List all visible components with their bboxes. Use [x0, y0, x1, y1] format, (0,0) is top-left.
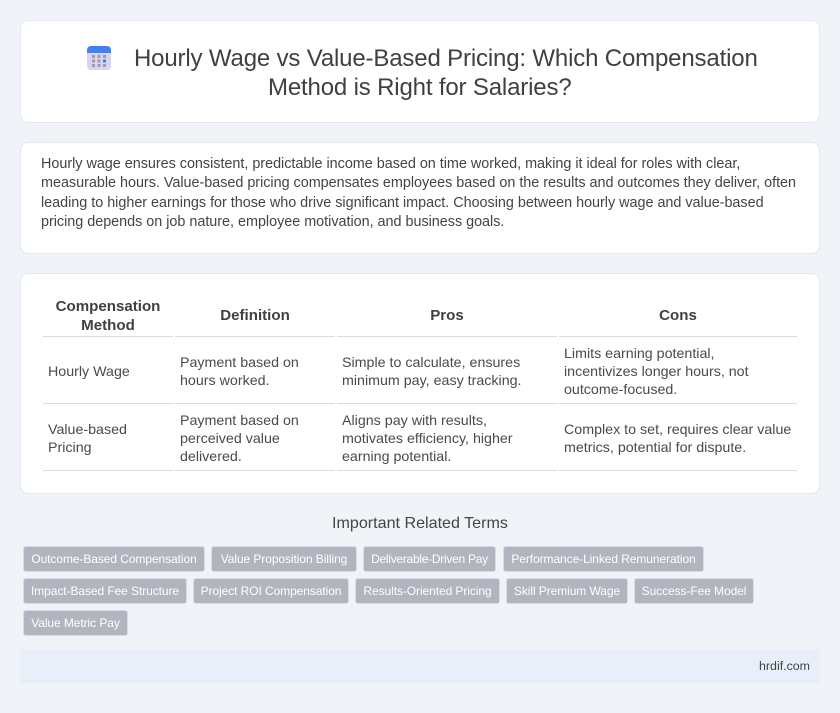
tag: Skill Premium Wage	[514, 584, 620, 598]
tag: Outcome-Based Compensation	[31, 552, 197, 566]
intro text	[41, 156, 796, 230]
tag	[355, 578, 500, 604]
cons: hourly wage: incentivizes longer hours, not	[564, 364, 749, 380]
tag	[363, 546, 496, 572]
intro text: Hourly wage ensures consistent, predictable income based on time worked, making it ideal for roles with clear,	[41, 156, 740, 172]
definition: value-based pricing	[180, 413, 299, 465]
table	[43, 298, 797, 471]
intro text: leading to higher earnings for those who drive significant impact. Choosing between hourly wage and value-based	[41, 195, 764, 211]
cons: hourly wage: Limits earning potential,	[564, 346, 715, 362]
tag: Success-Fee Model	[642, 584, 746, 598]
pros: value-based pricing: motivates efficiency, higher	[342, 431, 513, 447]
definition: hourly wage: Payment based on	[180, 355, 299, 371]
title: Hourly Wage vs Value-Based Pricing: Which Compensation	[134, 45, 758, 72]
title: Method is Right for Salaries?	[268, 74, 572, 101]
title	[134, 45, 758, 101]
definition: hourly wage	[180, 355, 299, 389]
header: compensation method: Compensation	[56, 298, 160, 315]
tag	[193, 578, 349, 604]
definition: value-based pricing: delivered.	[180, 449, 242, 465]
pros: hourly wage: minimum pay, easy tracking.	[342, 373, 522, 389]
tag: Impact-Based Fee Structure	[31, 584, 179, 598]
related terms heading: Important Related Terms	[332, 514, 508, 532]
row: value-based pricing: Pricing	[48, 440, 92, 456]
related terms tags	[23, 546, 754, 636]
footer source: hrdif.com	[759, 659, 810, 673]
pros: value-based pricing: earning potential.	[342, 449, 451, 465]
definition: value-based pricing: perceived value	[180, 431, 280, 447]
table panel	[20, 273, 820, 494]
tag	[211, 546, 357, 572]
tag: Project ROI Compensation	[201, 584, 341, 598]
tag: Deliverable-Driven Pay	[371, 552, 488, 566]
pros: value-based pricing: Aligns pay with results,	[342, 413, 487, 429]
row: value-based pricing: Value-based	[48, 422, 127, 438]
tag: Value Proposition Billing	[221, 552, 347, 566]
header: compensation method: Method	[81, 317, 135, 334]
pros: hourly wage	[342, 355, 522, 389]
cons: value-based pricing: Complex to set, requires clear value	[564, 422, 791, 438]
header: pros: Pros	[430, 307, 464, 324]
tag: Value Metric Pay	[31, 616, 120, 630]
icon: calendar	[87, 46, 111, 70]
cons: value-based pricing: metrics, potential for dispute.	[564, 440, 746, 456]
definition: hourly wage: hours worked.	[180, 373, 270, 389]
tag	[634, 578, 754, 604]
tag: Performance-Linked Remuneration	[511, 552, 696, 566]
pros: value-based pricing	[342, 413, 513, 465]
tag	[503, 546, 704, 572]
definition: value-based pricing: Payment based on	[180, 413, 299, 429]
pros: hourly wage: Simple to calculate, ensures	[342, 355, 520, 371]
tag	[23, 546, 205, 572]
cons: hourly wage: outcome-focused.	[564, 382, 677, 398]
tag	[506, 578, 628, 604]
cons: value-based pricing	[564, 422, 791, 456]
row: hourly wage: Hourly Wage	[48, 364, 130, 380]
cons: hourly wage	[564, 346, 749, 398]
tag	[23, 578, 187, 604]
header: cons: Cons	[659, 307, 697, 324]
intro panel	[20, 142, 820, 254]
row: value-based pricing	[48, 422, 127, 456]
header: compensation method	[56, 298, 160, 334]
tag: Results-Oriented Pricing	[363, 584, 492, 598]
tag	[23, 610, 128, 636]
intro text: measurable hours. Value-based pricing compensates employees based on the results and outcomes they deliver, often	[41, 175, 796, 191]
footer bar	[20, 649, 820, 683]
header: definition: Definition	[220, 307, 290, 324]
header card	[20, 20, 820, 123]
intro text: pricing depends on job nature, employee motivation, and business goals.	[41, 214, 504, 230]
